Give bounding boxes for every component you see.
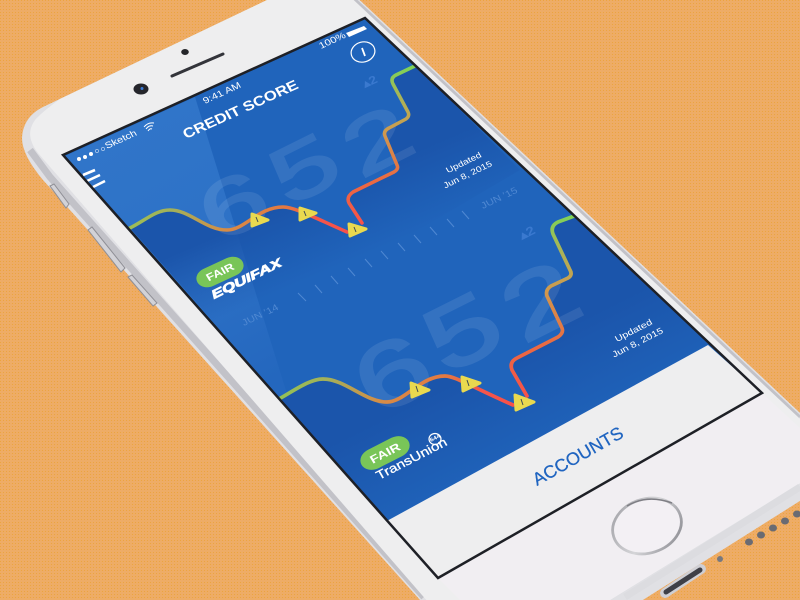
chart 2 line xyxy=(279,215,577,405)
menu icon xyxy=(83,170,105,187)
screw xyxy=(717,556,723,562)
chart 1 updated date: Jun 8, 2015 xyxy=(442,159,494,190)
battery icon xyxy=(346,26,367,37)
chart 1 warning markers xyxy=(252,208,366,236)
chart 2 rating badge: FAIR xyxy=(367,440,404,466)
timeline label end: JUN ’15 xyxy=(479,186,520,211)
chart 1 shaded area xyxy=(130,66,520,340)
timeline label start: JUN ’14 xyxy=(240,303,281,328)
chart 2 updated date: Updated xyxy=(613,318,654,344)
charging port xyxy=(665,569,701,593)
chart 2 big score: 5 xyxy=(406,271,519,392)
chart 2 big score: 6 xyxy=(336,313,449,434)
chart 1 big score: 2 xyxy=(327,87,428,194)
lower bezel xyxy=(438,393,800,600)
lighter wedge xyxy=(65,97,287,400)
status bar battery percent: 100% xyxy=(317,31,348,51)
Equifax logo: EQUIFAX xyxy=(209,256,285,302)
chart 2 big score xyxy=(336,240,597,434)
side buttons xyxy=(50,184,157,306)
rim right shading xyxy=(349,0,800,417)
camera xyxy=(134,84,148,94)
chart 1 updated date: Updated xyxy=(444,150,483,175)
chart 2 shaded area xyxy=(280,216,710,522)
info button xyxy=(349,39,377,65)
bottom edge highlight xyxy=(625,487,800,597)
chart 1 score change: ▴2 xyxy=(359,72,380,91)
chart 2 rating badge xyxy=(356,432,414,474)
status bar carrier: Sketch xyxy=(103,129,139,151)
chart 1 big score: 5 xyxy=(254,115,355,222)
chart 2 big score: 2 xyxy=(484,240,597,361)
title: CREDIT SCORE xyxy=(180,78,301,142)
accounts bar xyxy=(385,345,762,578)
accounts label: ACCOUNTS xyxy=(529,423,627,489)
chart 1 rating badge: FAIR xyxy=(204,260,237,284)
TransUnion logo: 644 xyxy=(429,434,442,444)
rim shading xyxy=(30,150,424,597)
wifi icon xyxy=(144,123,154,131)
chart 1 big score xyxy=(183,87,428,259)
chart 1 big score: 6 xyxy=(183,152,284,259)
front sensor xyxy=(181,49,189,55)
chart 2 updated date: Jun 8, 2015 xyxy=(610,326,666,360)
earpiece xyxy=(172,54,223,76)
chart 2 score change: ▴2 xyxy=(515,223,538,243)
speaker holes xyxy=(745,510,800,546)
timeline ticks xyxy=(298,211,469,301)
status bar time: 9:41 AM xyxy=(201,81,243,106)
chart 1 rating badge xyxy=(192,253,248,291)
chart 1 line xyxy=(128,65,417,232)
status bar signal dots xyxy=(77,147,105,161)
chart 2 warning markers xyxy=(411,377,534,410)
home button xyxy=(605,490,689,562)
TransUnion logo: TransUnion xyxy=(373,435,450,482)
